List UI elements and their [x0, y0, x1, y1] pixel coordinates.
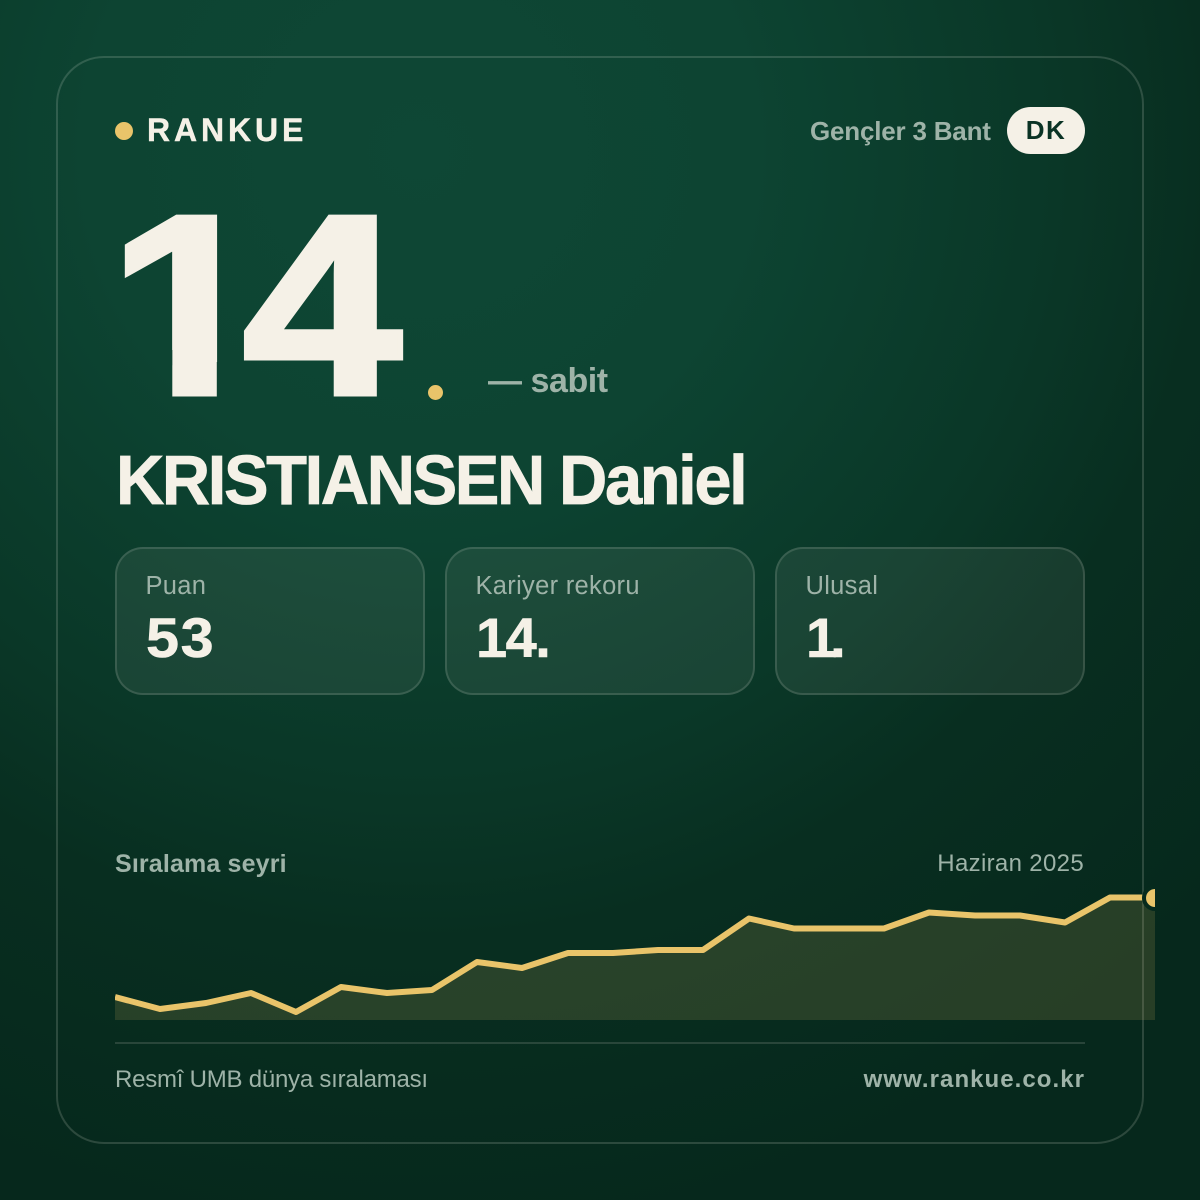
stat: Kariyer rekoru — [445, 547, 755, 695]
chart line — [115, 898, 1155, 1012]
brand logo — [115, 112, 307, 148]
icon: gold dot — [115, 122, 133, 140]
stat label: Ulusal — [806, 572, 878, 600]
stat value: 53 — [146, 606, 215, 669]
country badge: DK — [1026, 115, 1066, 145]
line chart — [115, 889, 1155, 1020]
rank dot — [428, 385, 443, 400]
brand name: RANKUE — [147, 112, 307, 148]
chart heading: Sıralama seyri — [115, 850, 287, 878]
footer url: www.rankue.co.kr — [864, 1066, 1085, 1093]
stat: Puan — [115, 547, 425, 695]
country badge — [1007, 107, 1085, 154]
chart area — [115, 898, 1155, 1020]
stat value: 1. — [806, 606, 839, 669]
rank number: 14 — [108, 162, 377, 449]
stat label: Puan — [146, 572, 206, 600]
current point marker — [1144, 887, 1166, 909]
stat: Ulusal — [775, 547, 1085, 695]
stat value: 14. — [476, 606, 549, 669]
chart date: Haziran 2025 — [937, 850, 1084, 877]
rank change: — sabit — [488, 362, 608, 400]
footer divider — [115, 1042, 1085, 1044]
stat label: Kariyer rekoru — [476, 572, 640, 600]
footer source: Resmî UMB dünya sıralaması — [115, 1066, 428, 1093]
category label: Gençler 3 Bant — [810, 116, 991, 146]
athlete name: KRISTIANSEN Daniel — [116, 441, 745, 519]
